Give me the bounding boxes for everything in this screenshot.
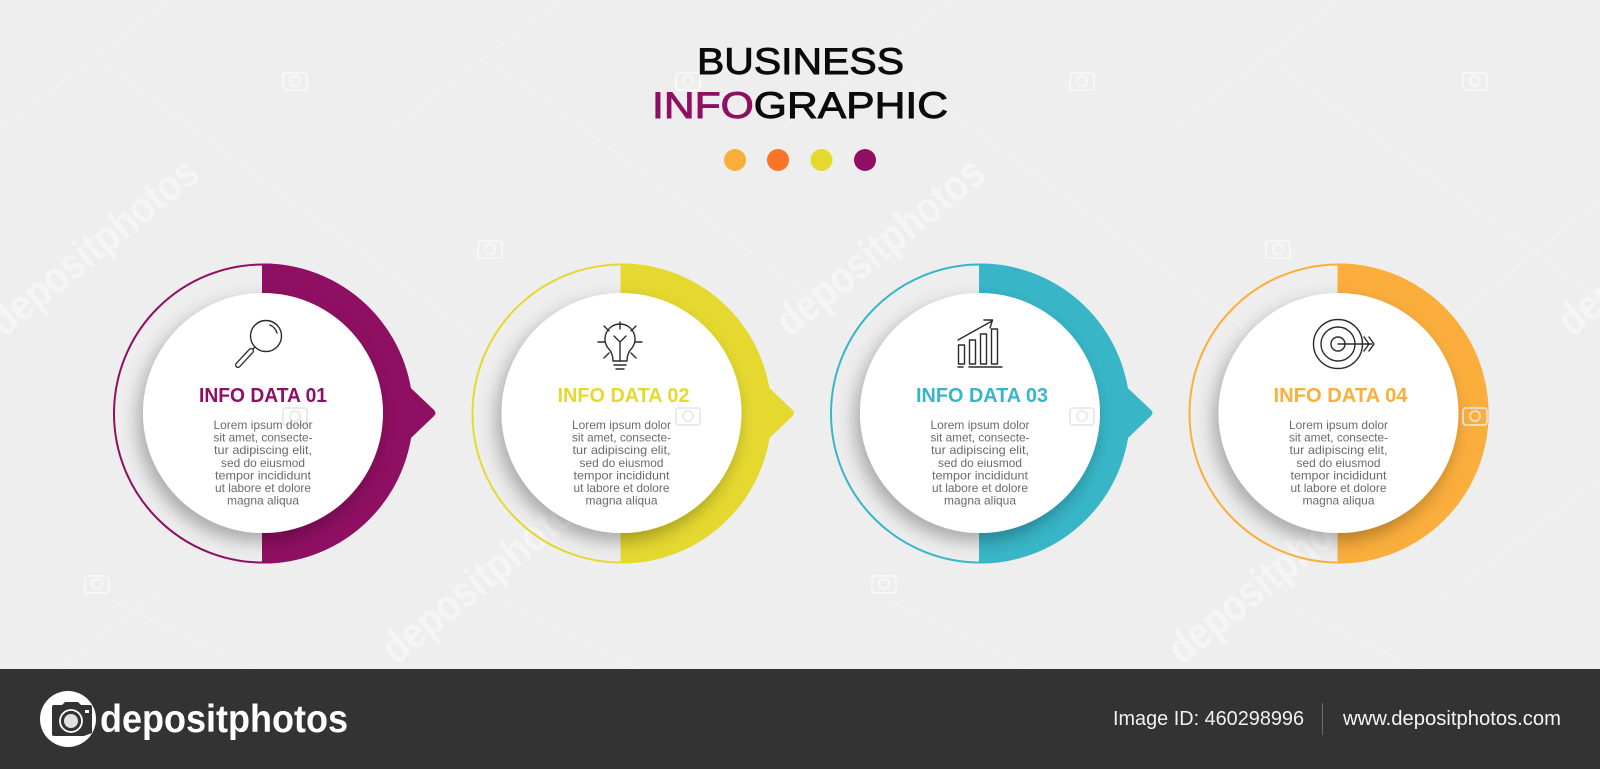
body text: Lorem ipsum dolor — [572, 418, 671, 432]
body text: tempor incididunt — [932, 468, 1029, 482]
icon: camera logo — [40, 691, 96, 747]
coloured half with arrow — [620, 264, 794, 564]
heading: INFO DATA 04 — [1274, 385, 1408, 407]
title line: infographic: INFO GRAPHIC — [652, 85, 948, 126]
title line: business: BUSINESS — [697, 41, 904, 82]
body text: magna aliqua — [1302, 494, 1375, 508]
body text: sit amet, consecte- — [930, 430, 1030, 444]
body text: ut labore et dolore — [932, 481, 1028, 495]
body text: ut labore et dolore — [574, 481, 670, 495]
panel: info data 02 — [472, 264, 794, 564]
body text: tur adipiscing elit, — [572, 443, 670, 457]
coloured half — [1338, 264, 1488, 564]
body text: tempor incididunt — [215, 468, 312, 482]
website url: www.depositphotos.com — [1342, 708, 1561, 730]
body text: tur adipiscing elit, — [1290, 443, 1388, 457]
body text — [214, 418, 313, 508]
body text: sed do eiusmod — [938, 456, 1022, 470]
icon: light bulb — [598, 322, 642, 369]
colour dots — [724, 149, 876, 171]
heading: INFO DATA 03 — [916, 385, 1048, 407]
icon: target with arrow — [1314, 320, 1374, 368]
body text: Lorem ipsum dolor — [1289, 418, 1388, 432]
divider — [1322, 703, 1323, 735]
body text: sed do eiusmod — [1296, 456, 1380, 470]
logo wordmark: depositphotos — [100, 698, 348, 741]
body text — [1289, 418, 1388, 508]
body text: sit amet, consecte- — [214, 430, 312, 444]
body text: tempor incididunt — [1290, 468, 1387, 482]
body text: magna aliqua — [586, 494, 658, 508]
body text: ut labore et dolore — [1290, 481, 1387, 495]
white circle — [860, 293, 1100, 533]
panel: info data 01 — [114, 264, 436, 564]
body text: sit amet, consecte- — [572, 430, 671, 444]
body text: tempor incididunt — [574, 468, 670, 482]
coloured half with arrow — [979, 264, 1152, 564]
body text — [572, 418, 671, 508]
panel: info data 03 — [831, 264, 1152, 564]
icon: magnifier — [238, 320, 282, 365]
ring outline — [1190, 264, 1488, 562]
title — [652, 41, 948, 126]
faint camera mark — [283, 408, 307, 425]
body text — [930, 418, 1030, 508]
white circle — [502, 293, 742, 533]
watermark pattern: depositphotos — [765, 147, 994, 346]
watermark pattern: depositphotos — [371, 475, 600, 674]
image id: Image ID: 460298996 — [1113, 708, 1304, 730]
faint camera mark — [1463, 408, 1487, 425]
white circle — [1218, 293, 1458, 533]
body text: Lorem ipsum dolor — [214, 418, 313, 432]
body text: magna aliqua — [227, 494, 299, 508]
body text: tur adipiscing elit, — [931, 443, 1029, 457]
heading: INFO DATA 01 — [199, 385, 327, 407]
body text: sed do eiusmod — [221, 456, 305, 470]
body text: sed do eiusmod — [580, 456, 664, 470]
faint camera mark — [676, 408, 700, 425]
body text: Lorem ipsum dolor — [930, 418, 1030, 432]
white circle — [143, 293, 383, 533]
body text: ut labore et dolore — [215, 481, 311, 495]
coloured half with arrow — [262, 264, 436, 564]
heading: INFO DATA 02 — [558, 385, 690, 407]
ring outline — [472, 264, 770, 562]
body text: sit amet, consecte- — [1289, 430, 1388, 444]
ring outline — [831, 264, 1129, 562]
icon: bar chart — [958, 320, 1002, 367]
body text: tur adipiscing elit, — [214, 443, 312, 457]
body text: magna aliqua — [944, 494, 1016, 508]
ring outline — [114, 264, 412, 562]
panel: info data 04 — [1190, 264, 1488, 564]
footer bar — [0, 669, 1600, 769]
faint camera mark — [1070, 408, 1094, 425]
watermark pattern: depositphotos — [1157, 475, 1386, 674]
